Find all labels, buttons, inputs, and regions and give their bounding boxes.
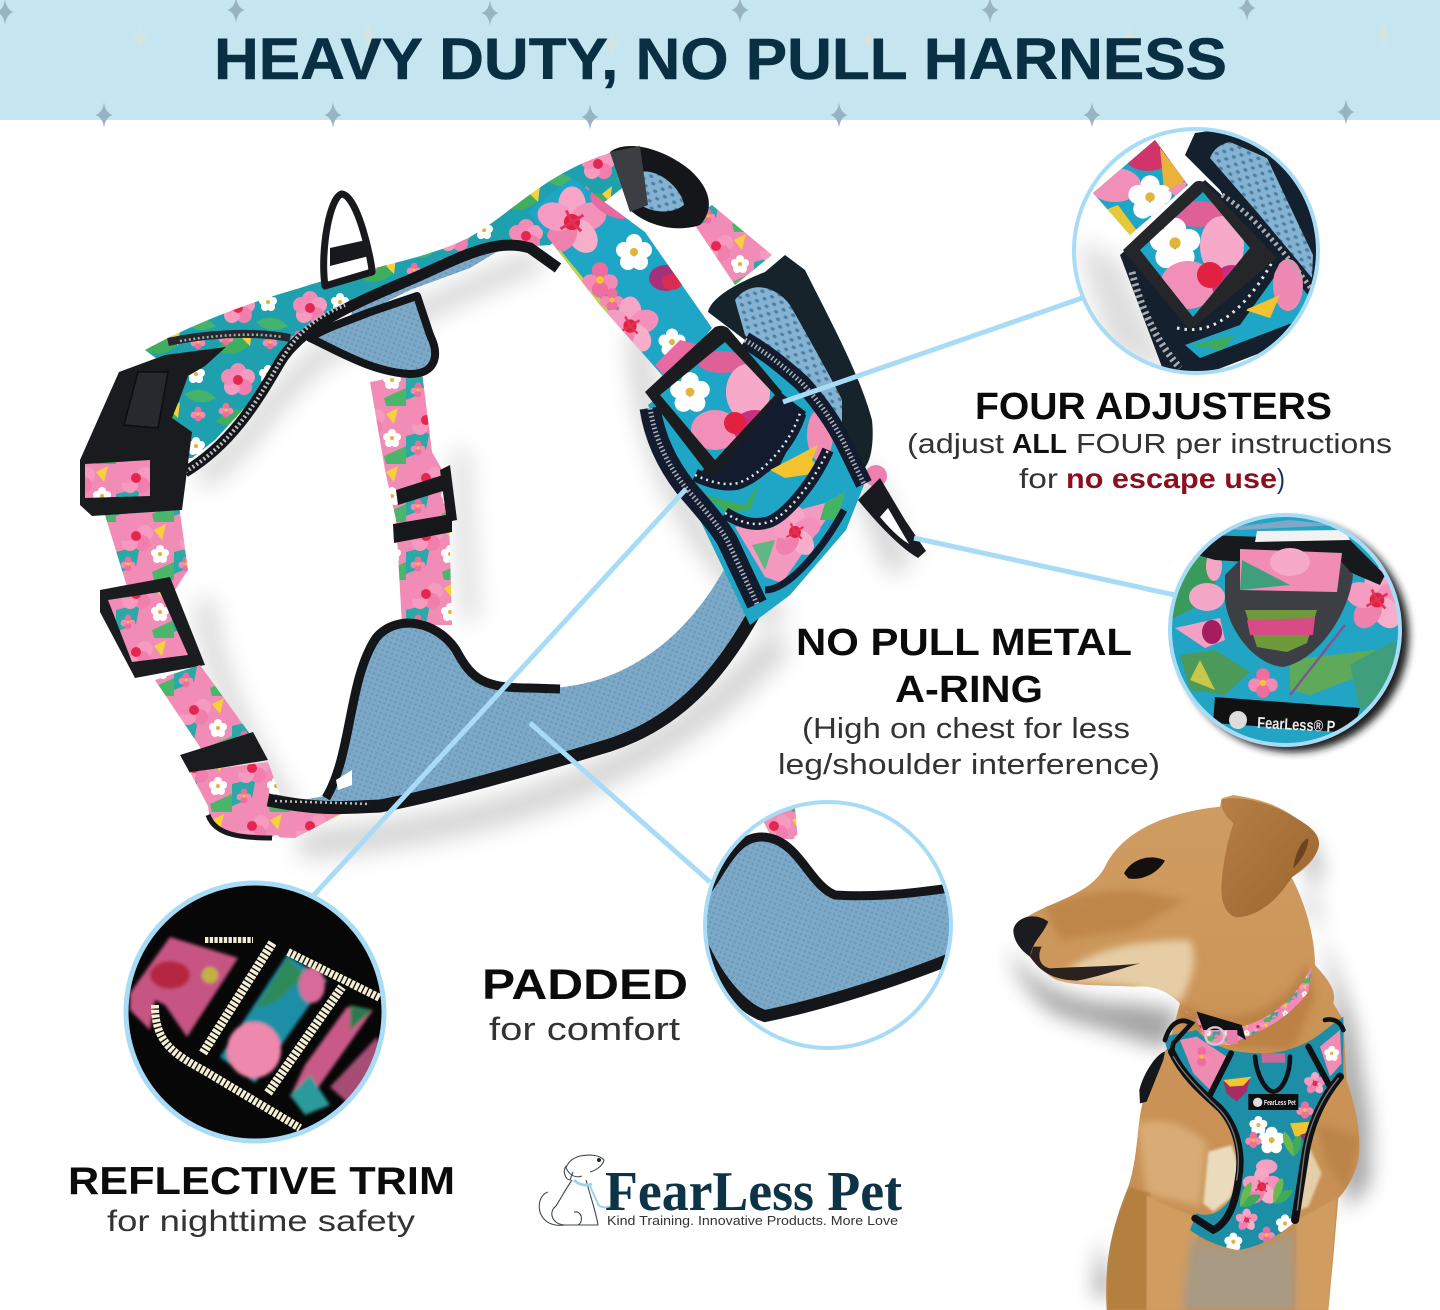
zoom circle: reflective trim (126, 883, 385, 1141)
harness brand tag: FearLess Pet (1264, 1098, 1296, 1107)
rear strap (690, 205, 772, 285)
header banner (0, 0, 1440, 130)
label: four adjusters: ) (1277, 463, 1285, 494)
dog body (1013, 795, 1359, 1310)
vertical centre strap (370, 372, 457, 625)
callout line: padded (530, 723, 710, 882)
dog mouth (1030, 947, 1140, 981)
dog collar (1180, 967, 1312, 1045)
logo: Kind Training. Innovative Products. More Love (607, 1214, 898, 1228)
callout line: reflective trim (314, 489, 686, 895)
main adjuster buckle (645, 326, 785, 476)
label: no pull metal a-ring: (High on chest for less (802, 713, 1130, 745)
lower-left adjuster (100, 577, 205, 678)
dog photo (1010, 795, 1370, 1310)
padded chest panel (268, 566, 756, 808)
label: no pull metal a-ring: A-RING (895, 669, 1043, 711)
zoom circle: padded mesh (700, 802, 960, 1048)
harness photo (80, 146, 926, 845)
shoulder mesh pad (708, 255, 873, 470)
dog harness (1163, 1017, 1343, 1251)
strap clip (180, 732, 268, 773)
label: four adjusters: FOUR per instructions (1076, 428, 1392, 459)
label: four adjusters: no escape use (1066, 463, 1277, 494)
mesh strip under saddle (350, 250, 500, 320)
callout line: metal A-ring (914, 538, 1175, 595)
harness shadow (200, 260, 900, 845)
dog shading (1043, 890, 1360, 1310)
navy reflective bands (650, 340, 864, 604)
label: no pull metal a-ring (778, 622, 1160, 781)
top neck loop (610, 146, 709, 228)
side release buckle (80, 347, 226, 516)
logo (539, 1155, 902, 1228)
saddle floral back panel (145, 150, 645, 458)
label: padded (482, 961, 688, 1047)
side harness buckle (1139, 1052, 1165, 1103)
label: reflective trim: REFLECTIVE TRIM (68, 1160, 455, 1203)
label: four adjusters (907, 386, 1392, 494)
label: four adjusters: (adjust (907, 428, 1004, 459)
label: four adjusters: FOUR ADJUSTERS (975, 386, 1332, 428)
label: no pull metal a-ring: NO PULL METAL (796, 622, 1132, 664)
label: padded: for comfort (489, 1011, 680, 1047)
upper right strap (528, 178, 712, 376)
metal A-ring (858, 465, 926, 558)
dog eye (1124, 857, 1165, 879)
label: four adjusters: for (1019, 463, 1058, 494)
label: reflective trim: for nighttime safety (107, 1205, 415, 1238)
harness brand tag (1248, 1094, 1298, 1110)
dog shadow (1010, 830, 1370, 1297)
label text in circle: FearLess® P (1257, 715, 1336, 736)
neck strap lower (155, 665, 258, 765)
dog ear (1221, 798, 1319, 917)
mesh teardrop (310, 296, 435, 374)
zoom circle: A-ring (1170, 515, 1412, 752)
title: HEAVY DUTY, NO PULL HARNESS (214, 27, 1227, 92)
callout line: four adjusters (783, 297, 1085, 402)
label: padded: PADDED (482, 961, 688, 1009)
floral chest panel (648, 338, 864, 625)
label: reflective trim (68, 1160, 455, 1238)
reflective trim on back (168, 245, 558, 472)
zoom circle: adjuster (1074, 125, 1330, 380)
harness florals (1180, 1030, 1342, 1251)
logo icon: puppy (539, 1155, 612, 1225)
label: no pull metal a-ring: leg/shoulder interference) (778, 749, 1160, 781)
handle (324, 194, 372, 286)
chest strap (105, 498, 188, 590)
logo: FearLess Pet (605, 1161, 902, 1223)
bottom loop strap (190, 762, 345, 838)
dog nose (1013, 916, 1048, 957)
label: four adjusters: ALL (1012, 428, 1067, 459)
